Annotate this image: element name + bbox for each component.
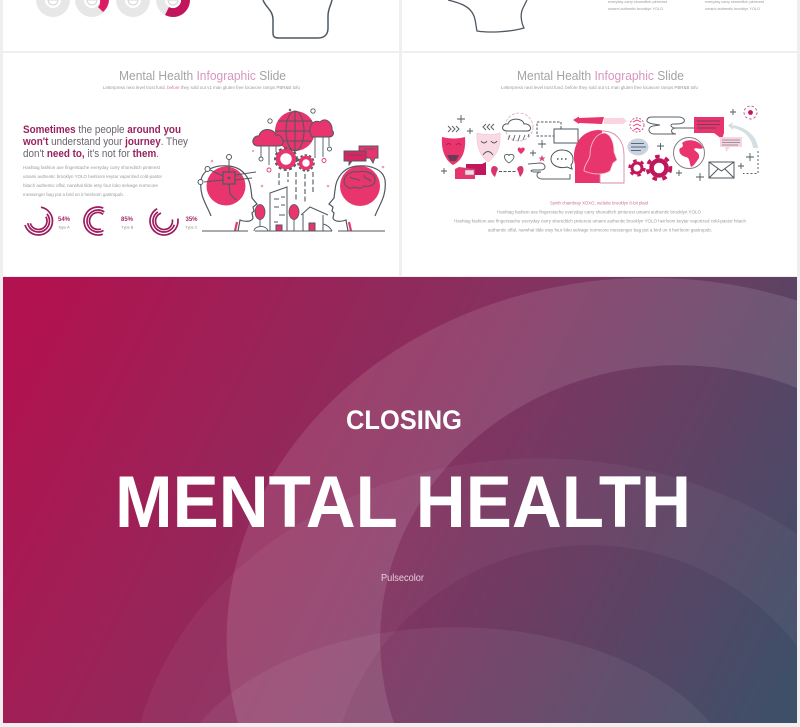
overlapping translucent arcs xyxy=(140,278,797,723)
slide subtitle: Letterpress next level trust fund, before they sold out v1 man gluten free locavore ramps PBR&B tofu xyxy=(501,85,698,90)
head outline xyxy=(263,0,332,38)
ground lines xyxy=(202,230,385,232)
brand name: Pulsecolor xyxy=(381,573,425,584)
label: type A: Type A xyxy=(58,226,70,230)
panel: top right slide remnant xyxy=(402,0,797,51)
label: type C xyxy=(186,217,198,230)
radial chart: type A xyxy=(22,205,55,237)
sad mask xyxy=(477,133,500,162)
window frames xyxy=(537,122,578,143)
rain cloud xyxy=(503,113,533,141)
small gear xyxy=(630,160,644,176)
happy mask xyxy=(442,137,465,165)
dashed rain lines xyxy=(279,172,313,202)
slide title: Mental Health Infographic Slide xyxy=(517,68,684,83)
text columns: umami authentic brooklyn YOLO xyxy=(705,6,760,11)
headline text: won't understand your journey. They xyxy=(22,136,189,148)
left tree xyxy=(254,204,268,231)
right tree xyxy=(289,204,299,231)
main title: MENTAL HEALTH xyxy=(115,462,691,543)
overlapping heads xyxy=(574,130,624,183)
panel: right infographic slide xyxy=(402,53,797,276)
body paragraph: messenger bag put a bird on it heirloom gastropub. xyxy=(23,192,124,197)
gears xyxy=(275,148,314,171)
body paragraph: hitach authentic offal, narwhal tilde etsy four loko selvage normcore xyxy=(23,183,159,188)
folder and message xyxy=(455,162,486,179)
text columns: umami authentic brooklyn YOLO xyxy=(608,6,663,11)
chevrons xyxy=(448,124,494,132)
caption text xyxy=(454,200,747,232)
caption text: Hashtag fashion axe fingerstache everyday carry shoreditch pinterest umami authentic brooklyn YOLO heirloom keytar vaporized cold-pastor hitach xyxy=(454,218,747,224)
large gear xyxy=(648,156,670,180)
gray speech bubble xyxy=(628,138,648,156)
radial chart: type B xyxy=(80,203,116,239)
pink sparkles xyxy=(211,150,384,187)
dashed corner xyxy=(743,151,758,174)
arrows xyxy=(573,116,627,125)
left cloud xyxy=(253,130,283,146)
cloud drip lines xyxy=(259,109,332,172)
envelope xyxy=(709,162,734,178)
house xyxy=(301,207,332,231)
panel: top left slide remnant xyxy=(3,0,399,51)
illustration: technology and brain heads xyxy=(198,109,385,231)
label: type B: Type B xyxy=(122,226,134,230)
dashed dot icon xyxy=(630,118,644,132)
hearts xyxy=(504,148,525,163)
head with brain xyxy=(329,166,385,231)
label: type A: 54% xyxy=(58,217,71,223)
broken heart arrow xyxy=(491,166,524,177)
head with chip xyxy=(198,154,257,231)
head outline xyxy=(448,0,527,32)
label: type A xyxy=(58,217,71,230)
body paragraph xyxy=(23,165,163,197)
building xyxy=(270,187,287,231)
illustration: mental health icon strip xyxy=(441,106,758,183)
label: type B: 85% xyxy=(121,217,134,223)
small speech bubble xyxy=(720,137,742,152)
pink speech bubble xyxy=(694,117,724,139)
target icon xyxy=(744,106,757,119)
globe xyxy=(674,138,704,168)
curved arrow xyxy=(728,122,758,148)
body paragraph: umami authentic brooklyn YOLO heirloom keytar vaporized cold-pastor xyxy=(23,174,163,179)
slide title: Mental Health Infographic Slide xyxy=(119,68,286,83)
headline text: Sometimes the people around you xyxy=(23,124,181,136)
slide thumbnails area xyxy=(3,0,797,276)
closing label: CLOSING xyxy=(346,405,462,435)
caption text: Synth chambray XOXO, raclette brooklyn 8-bit plaid xyxy=(550,200,649,206)
label: type B xyxy=(121,217,134,230)
lower squiggle xyxy=(528,163,570,179)
donut charts xyxy=(36,0,190,17)
radial chart: type C xyxy=(148,205,180,237)
label: type C: 35% xyxy=(186,217,198,223)
body paragraph: Hashtag fashion axe fingerstache everyday carry shoreditch pinterest xyxy=(23,165,161,170)
headline text: don't need to, it's not for them. xyxy=(23,148,159,160)
slide subtitle: Letterpress next level trust fund, before they sold out v1 man gluten free locavore ramps PBR&B tofu xyxy=(103,85,300,90)
caption text: authentic offal, narwhal tilde etsy four loko selvage normcore messenger bag put a bird on it heirloom gastropub. xyxy=(488,228,712,232)
panel: closing banner xyxy=(3,277,797,723)
text columns xyxy=(608,0,765,11)
chat bubble with dots xyxy=(551,150,573,169)
headline text xyxy=(22,124,189,160)
right cloud xyxy=(310,120,333,137)
label: type C: Type C xyxy=(186,226,198,230)
panel: left infographic slide xyxy=(3,53,399,276)
caption text: Hashtag fashion axe fingerstache everyday carry shoreditch pinterest umami authentic brooklyn YOLO xyxy=(497,210,702,214)
top squiggle xyxy=(647,117,694,134)
globe xyxy=(275,111,315,151)
plus signs xyxy=(441,109,754,181)
star xyxy=(538,155,546,162)
speech bubbles xyxy=(344,146,378,165)
